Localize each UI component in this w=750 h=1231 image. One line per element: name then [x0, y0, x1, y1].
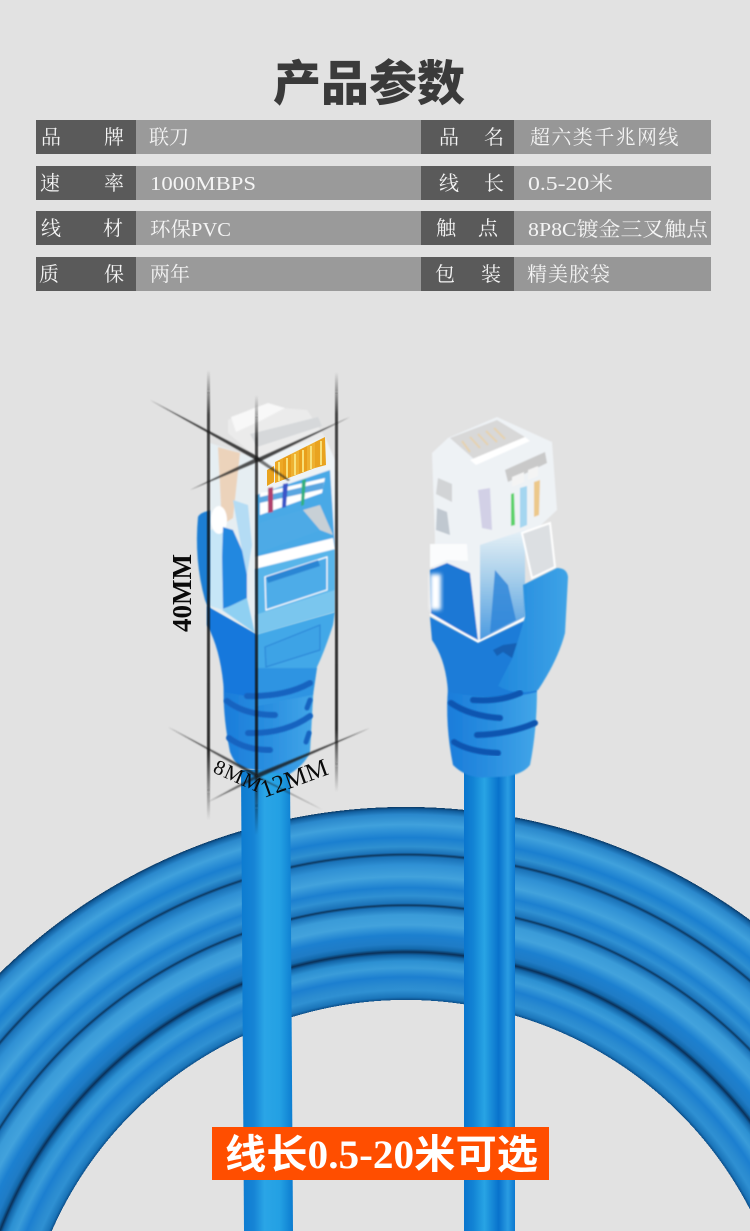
- dimension label: 8MM: 8MM: [210, 755, 266, 797]
- row: brand and product name: 名: [484, 126, 504, 149]
- row: speed and length: 速: [40, 172, 60, 195]
- left clear plug: [210, 403, 335, 635]
- row: speed and length: 0.5-20米: [528, 172, 613, 195]
- row: warranty and packaging: 包: [435, 263, 455, 286]
- row: speed and length: 1000MBPS: [150, 173, 256, 195]
- row: material and contacts: 环保PVC: [150, 218, 231, 241]
- row: warranty and packaging: 两年: [150, 263, 190, 286]
- left boot ring grooves: [227, 683, 310, 750]
- title: 产品参数: [273, 44, 465, 114]
- row: material and contacts: 材: [103, 217, 123, 240]
- row: brand and product name: 品: [41, 126, 61, 149]
- row: warranty and packaging: 精美胶袋: [527, 263, 611, 286]
- row: material and contacts: 线: [41, 217, 61, 240]
- left cable: [241, 770, 293, 1231]
- row: brand and product name: [36, 120, 711, 154]
- right plug highlight: [430, 574, 441, 610]
- row: warranty and packaging: [36, 257, 711, 291]
- parameter table: [36, 120, 711, 291]
- left connector boot: [197, 510, 335, 775]
- left gold contacts: [267, 437, 326, 486]
- right connector boot: [430, 568, 568, 778]
- right clear plug: [430, 417, 557, 642]
- right connector: [430, 417, 568, 778]
- row: material and contacts: [36, 211, 711, 245]
- row: warranty and packaging: 保: [104, 263, 124, 286]
- left connector with dimensions: [150, 370, 370, 835]
- row: speed and length: [36, 166, 711, 200]
- row: material and contacts: 点: [478, 217, 499, 240]
- row: material and contacts: 8P8C镀金三叉触点: [528, 218, 709, 241]
- row: brand and product name: 联刀: [149, 126, 189, 149]
- row: speed and length: 线: [439, 172, 459, 195]
- row: brand and product name: 超六类千兆网线: [530, 126, 680, 149]
- length badge: 线长0.5-20米可选: [225, 1132, 538, 1177]
- row: brand and product name: 牌: [104, 126, 124, 149]
- right boot ring grooves: [451, 693, 535, 753]
- right cable: [464, 770, 515, 1231]
- row: speed and length: 长: [484, 172, 504, 195]
- row: warranty and packaging: 质: [39, 263, 59, 286]
- dimension label: 40MM: 40MM: [167, 554, 197, 632]
- dimension lines: [150, 370, 370, 835]
- row: brand and product name: 品: [439, 126, 459, 149]
- row: material and contacts: 触: [436, 217, 457, 240]
- row: speed and length: 率: [104, 172, 124, 195]
- row: warranty and packaging: 装: [481, 263, 501, 286]
- coiled cable: [0, 800, 750, 1231]
- dimension label: 12MM: 12MM: [257, 754, 332, 804]
